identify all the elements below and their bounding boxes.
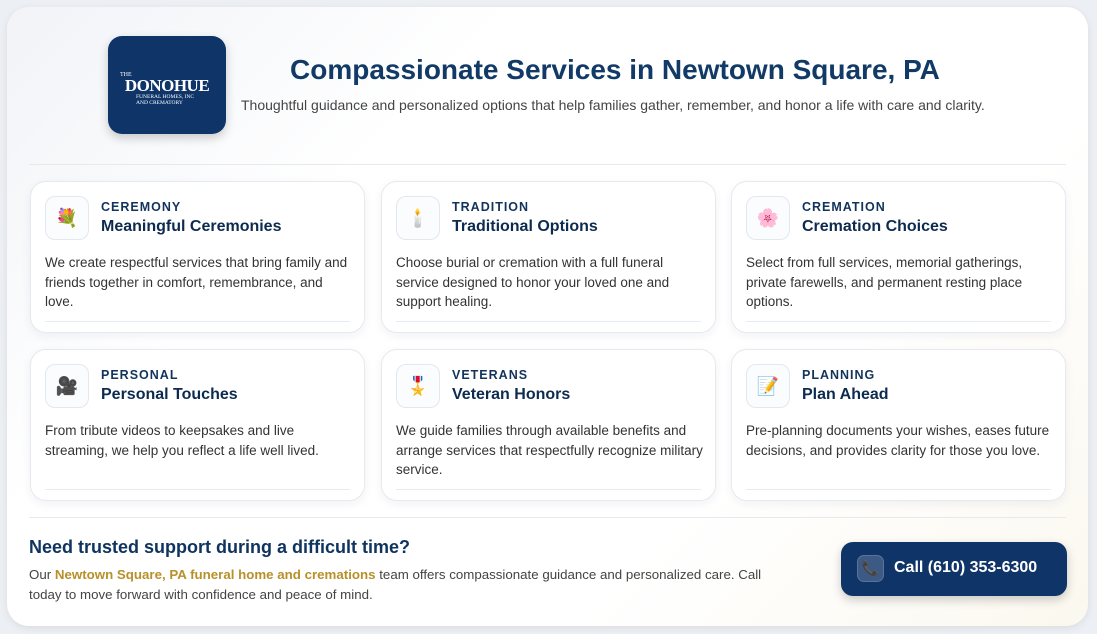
- card: personal: Personal Touches: [101, 386, 238, 403]
- card: cremation: 🌸: [757, 208, 779, 228]
- call button: [841, 542, 1067, 596]
- card: tradition: [381, 181, 716, 333]
- card: planning: [731, 349, 1066, 501]
- card: cremation: Cremation Choices: [802, 218, 948, 235]
- card: ceremony: 💐: [56, 208, 78, 228]
- card: planning: Plan Ahead: [802, 386, 889, 403]
- card: veterans: [381, 349, 716, 501]
- logo: AND CREMATORY: [136, 100, 183, 106]
- cta heading: Need trusted support during a difficult time?: [29, 537, 410, 557]
- card: planning: Pre-planning documents your wishes, eases future decisions, and provides clarity for those you love.: [746, 423, 1049, 458]
- cta text: Our Newtown Square, PA funeral home and cremations team offers compassionate guidance and personalized care. Call today to move forward with confidence and peace of mind.: [29, 567, 761, 602]
- card: personal: PERSONAL: [101, 368, 178, 382]
- logo: DONOHUE: [125, 76, 209, 95]
- card: cremation: CREMATION: [802, 200, 886, 214]
- card: personal: [30, 349, 365, 501]
- card: personal: 🎥: [56, 376, 78, 396]
- card: ceremony: CEREMONY: [101, 200, 181, 214]
- card: personal: From tribute videos to keepsakes and live streaming, we help you reflect a life well lived.: [45, 423, 319, 458]
- logo: [108, 36, 226, 134]
- card: ceremony: We create respectful services that bring family and friends together in comfort, remembrance, and love.: [45, 255, 347, 309]
- card: tradition: TRADITION: [452, 200, 529, 214]
- card: tradition: Traditional Options: [452, 218, 598, 235]
- call button: Call (610) 353-6300: [894, 559, 1037, 576]
- card: veterans: 🎖️: [407, 376, 429, 396]
- card: tradition: 🕯️: [407, 208, 429, 228]
- title: Compassionate Services in Newtown Square, PA: [290, 54, 940, 85]
- subtitle: Thoughtful guidance and personalized options that help families gather, remember, and honor a life with care and clarity.: [241, 97, 985, 113]
- card: tradition: Choose burial or cremation with a full funeral service designed to honor your loved one and support healing.: [396, 255, 669, 309]
- icon: phone: 📞: [862, 560, 879, 576]
- card: veterans: VETERANS: [452, 368, 528, 382]
- logo: FUNERAL HOMES, INC: [136, 94, 194, 100]
- card: cremation: [731, 181, 1066, 333]
- card: cremation: Select from full services, memorial gatherings, private farewells, and permanent resting place options.: [746, 255, 1022, 309]
- logo: THE: [120, 72, 132, 78]
- card: veterans: Veteran Honors: [452, 386, 570, 403]
- card: planning: PLANNING: [802, 368, 875, 382]
- card: ceremony: [30, 181, 365, 333]
- card: veterans: We guide families through available benefits and arrange services that respectfully recognize military service.: [396, 423, 703, 477]
- card: planning: 📝: [757, 376, 779, 396]
- card: ceremony: Meaningful Ceremonies: [101, 218, 281, 235]
- icon: phone: [857, 555, 884, 582]
